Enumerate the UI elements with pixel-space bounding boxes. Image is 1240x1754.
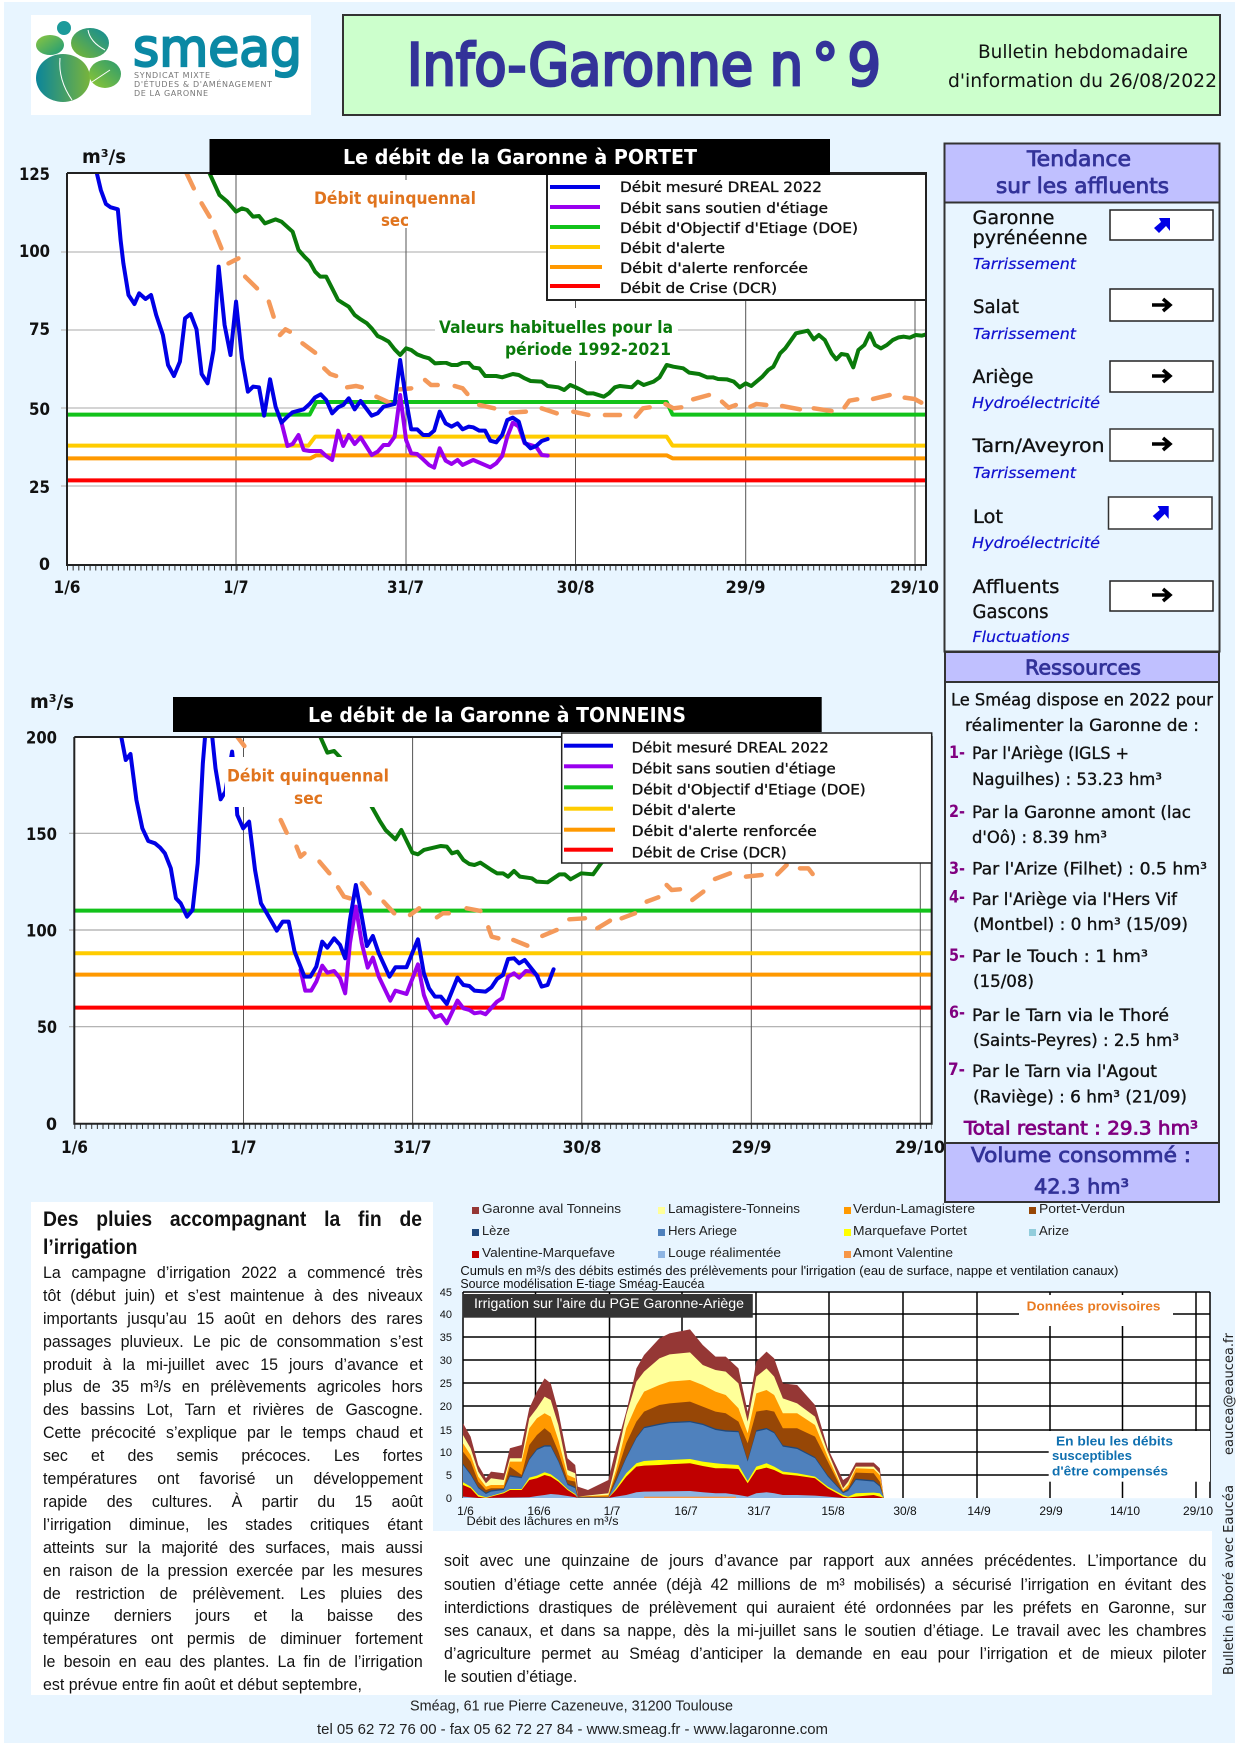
row: Lot — [972, 497, 1212, 552]
items list: Naguilhes) : 53.23 hm³ — [972, 770, 1162, 790]
row: Affluents Gascons: Gascons — [972, 601, 1048, 623]
article heading — [43, 1208, 422, 1259]
x axis labels: 15/8 — [821, 1504, 845, 1518]
article text: left column: de restriction de prélèvement. Les pluies des — [43, 1584, 423, 1603]
x axis labels: 29/10 — [890, 578, 939, 598]
logo wordmark: smeag — [133, 19, 302, 79]
x axis labels: 31/7 — [747, 1504, 771, 1518]
y axis labels: 25 — [440, 1378, 452, 1390]
item numbers: 6- — [949, 1003, 965, 1023]
intro text: Le Sméag dispose en 2022 pour — [951, 690, 1213, 710]
y axis labels: 25 — [29, 478, 50, 498]
y axis labels: 35 — [440, 1332, 452, 1344]
icon: arrow right — [1152, 589, 1170, 601]
x axis labels: 29/9 — [732, 1138, 772, 1158]
panel: ressources — [945, 652, 1219, 1143]
y axis labels: 50 — [29, 400, 50, 420]
chart legend: Amont Valentine — [853, 1245, 953, 1260]
article text: left column: températures ont favorisé un développement — [43, 1469, 423, 1488]
x axis labels: 1/7 — [604, 1504, 621, 1518]
article text: left column: La campagne d’irrigation 2022 a commencé très — [43, 1263, 423, 1282]
x axis labels: 14/10 — [1110, 1504, 1140, 1518]
y axis labels: 15 — [440, 1425, 452, 1437]
panel: volume consommé: Volume consommé : — [971, 1143, 1191, 1167]
y axis labels: 5 — [446, 1470, 452, 1482]
legend: Débit d'alerte renforcée — [632, 824, 817, 840]
article text: left column: plus de 35 m³/s en prélèvements agricoles hors — [43, 1377, 423, 1396]
x axis labels: 1/7 — [224, 578, 248, 598]
article text: continuation: soit avec une quinzaine de jours d’avance par rapport aux années précédentes. L’importance du — [444, 1551, 1206, 1570]
article white background — [31, 1202, 1212, 1695]
legend: Débit d'alerte — [632, 803, 736, 819]
legend: Débit sans soutien d'étiage — [632, 761, 836, 777]
chart subtitle: Cumuls en m³/s des débits estimés des prélèvements pour l'irrigation (eau de surface, nappe et ventilation canaux) — [460, 1264, 1118, 1278]
intro text: réalimenter la Garonne de : — [965, 716, 1199, 736]
title: Info-Garonne n°9 — [407, 31, 881, 99]
x axis labels: 16/7 — [674, 1504, 698, 1518]
item numbers: 4- — [949, 888, 965, 908]
items list: Par le Tarn via le Thoré — [972, 1006, 1169, 1026]
icon: arrow right — [1152, 299, 1170, 311]
axes frame — [74, 737, 932, 1124]
note: en bleu les débits: En bleu les débits — [1056, 1434, 1173, 1449]
vertical credit: email: eaucea@eaucea.fr — [1222, 1332, 1237, 1455]
row: Salat — [973, 289, 1213, 343]
items list: d'Oô) : 8.39 hm³ — [972, 828, 1107, 848]
icon: arrow up-right — [1154, 218, 1170, 233]
row: Affluents Gascons — [972, 576, 1213, 646]
y axis labels: 50 — [37, 1018, 57, 1038]
legend — [562, 733, 932, 863]
panel heading: Ressources — [1025, 656, 1141, 680]
icon: pebbles — [36, 21, 121, 102]
chart legend: Lèze — [482, 1223, 510, 1238]
x axis labels: 30/8 — [562, 1138, 602, 1158]
row: Salat: Salat — [973, 296, 1019, 318]
article text: left column: importants jusqu’au 15 août en dehors des rares — [43, 1309, 423, 1328]
legend: Débit de Crise (DCR) — [620, 281, 777, 297]
chart legend: Hers Ariege — [668, 1223, 737, 1238]
annotation: débit quinquennal sec: Débit quinquennal — [227, 767, 389, 787]
plot area — [463, 1292, 1210, 1498]
article text: left column: quinze derniers jours et la baisse des — [43, 1606, 423, 1625]
x axis labels: 1/6 — [54, 578, 80, 598]
annotation: valeurs habituelles — [435, 308, 678, 361]
y axis labels: 100 — [26, 922, 57, 942]
chart title bar: Le débit de la Garonne à PORTET — [343, 145, 697, 169]
x axis labels: 1/6 — [457, 1504, 474, 1518]
article text: continuation: ses canaux, et dans sa nappe, dès la mi-juillet sans le soutien d’étiage. Le travail avec les chambres — [444, 1621, 1206, 1640]
y axis labels — [440, 1287, 452, 1505]
chart legend: Garonne aval Tonneins — [482, 1201, 622, 1216]
panel heading: Tendance — [1026, 147, 1131, 171]
article text: continuation: soutien d’étiage cette année (déjà 42 millions de m³ mobilisés) a sécurisé l’irrigation en évitant des — [444, 1575, 1206, 1594]
x axis labels: 29/10 — [1183, 1504, 1213, 1518]
chart title box — [462, 1294, 753, 1318]
row: Lot: Hydroélectricité — [972, 534, 1100, 552]
article text: left column: sec et des semis précoces. Les fortes — [43, 1446, 423, 1465]
total restant: Total restant : 29.3 hm³ — [963, 1118, 1198, 1140]
article text: left column: températures ont permis de diminuer fortement — [43, 1629, 423, 1648]
plot area — [74, 737, 932, 1124]
article text: left column: en raison de la pression exercée par les mesures — [43, 1561, 423, 1580]
annotation: débit quinquennal sec: sec — [381, 211, 409, 231]
y axis labels: 0 — [446, 1493, 452, 1505]
row: Garonne pyrénéenne: Garonne — [972, 207, 1054, 229]
axis caption: Débit des lâchures en m³/s — [466, 1514, 618, 1528]
item numbers: 7- — [948, 1060, 965, 1080]
items list: (15/08) — [973, 972, 1034, 992]
logo: smeag — [31, 15, 311, 115]
legend: Débit sans soutien d'étiage — [620, 201, 828, 217]
y axis labels: 100 — [19, 242, 50, 262]
legend: Débit d'Objectif d'Etiage (DOE) — [632, 782, 866, 798]
row: Garonne pyrénéenne: Tarrissement — [973, 255, 1077, 273]
chart: irrigation stacked areas — [440, 1201, 1213, 1528]
chart: débit Garonne à Portet — [19, 139, 939, 598]
chart title box: Irrigation sur l'aire du PGE Garonne-Ariège — [474, 1296, 744, 1311]
icon: arrow right — [1152, 370, 1170, 382]
annotation: valeurs habituelles: période 1992-2021 — [505, 340, 671, 360]
item numbers: 5- — [949, 946, 965, 966]
bulletin date — [948, 41, 1217, 92]
x axis labels: 29/10 — [895, 1138, 945, 1158]
title banner — [343, 15, 1220, 115]
items list — [972, 744, 1207, 1108]
footer: Sméag, 61 rue Pierre Cazeneuve, 31200 Toulouse — [410, 1698, 733, 1715]
items list: Par le Touch : 1 hm³ — [972, 947, 1148, 967]
items list: Par la Garonne amont (lac — [972, 803, 1191, 823]
article text: left column: est prévue entre fin août et début septembre, — [43, 1675, 362, 1694]
legend: Débit mesuré DREAL 2022 — [632, 740, 829, 756]
bulletin date: Bulletin hebdomadaire — [978, 41, 1188, 63]
threshold and flow curves — [74, 730, 933, 1023]
legend: Débit d'Objectif d'Etiage (DOE) — [620, 221, 858, 237]
row: Salat: Tarrissement — [973, 325, 1077, 343]
row: Lot: Lot — [973, 506, 1003, 528]
annotation: débit quinquennal sec — [225, 757, 411, 809]
y axis labels: 75 — [29, 320, 50, 340]
row: Garonne pyrénéenne: pyrénéenne — [972, 227, 1088, 249]
panel: volume consommé: 42.3 hm³ — [1034, 1174, 1129, 1198]
plot area — [67, 173, 926, 565]
chart legend: Arize — [1039, 1223, 1069, 1238]
row: Tarn/Aveyron — [971, 429, 1213, 482]
note: en bleu les débits: d'être compensés — [1052, 1464, 1168, 1479]
annotation: débit quinquennal sec — [312, 180, 478, 231]
chart: débit Garonne à Tonneins — [26, 691, 945, 1158]
x axis labels: 29/9 — [726, 578, 766, 598]
panel: tendance sur les affluents — [944, 144, 1220, 652]
chart title bar: Le débit de la Garonne à TONNEINS — [308, 703, 686, 727]
article text: continuation: le soutien d’étiage. — [444, 1667, 577, 1686]
y axis labels: 150 — [26, 825, 57, 845]
chart legend: Portet-Verdun — [1039, 1201, 1125, 1216]
y axis labels: 125 — [19, 165, 50, 185]
legend: Débit mesuré DREAL 2022 — [620, 180, 822, 196]
article text: left column: produit à la mi-juillet avec 15 jours d’avance et — [43, 1355, 423, 1374]
chart subtitle — [460, 1264, 1118, 1291]
annotation: débit quinquennal sec: Débit quinquennal — [314, 189, 476, 209]
y axis labels: 45 — [440, 1287, 452, 1299]
note: en bleu les débits: susceptibles — [1052, 1448, 1132, 1463]
row: Ariège: Ariège — [972, 366, 1034, 388]
chart legend: Valentine-Marquefave — [482, 1245, 615, 1260]
chart legend: Marquefave Portet — [853, 1223, 967, 1238]
x axis labels: 30/8 — [556, 578, 594, 598]
annotation: débit quinquennal sec: sec — [294, 789, 323, 809]
logo tagline: SYNDICAT MIXTE — [134, 71, 210, 80]
threshold and flow curves — [67, 173, 928, 480]
article heading: l’irrigation — [43, 1236, 137, 1259]
article text: continuation — [444, 1551, 1206, 1686]
article text: left column: atteints sur la majorité des surfaces, mais aussi — [43, 1538, 423, 1557]
footer — [317, 1698, 828, 1738]
row: Tarn/Aveyron: Tarrissement — [973, 464, 1077, 482]
x axis labels — [54, 578, 939, 598]
logo tagline: D'ÉTUDES & D'AMÉNAGEMENT — [134, 78, 272, 89]
bulletin date: d'information du 26/08/2022 — [948, 70, 1217, 92]
article text: left column: des bassins Lot, Tarn et rivières de Gascogne. — [43, 1400, 423, 1419]
x axis labels: 31/7 — [394, 1138, 432, 1158]
x axis labels: 14/9 — [967, 1504, 991, 1518]
row: Affluents Gascons: Fluctuations — [972, 628, 1070, 646]
article text: continuation: interdictions drastiques de prélèvement qui auraient été ordonnées par les préfets en Garonne, sur — [444, 1598, 1206, 1617]
y axis labels — [26, 728, 57, 1135]
article text: left column: rapide des cultures. À partir du 15 août — [43, 1492, 423, 1511]
article text: left column: tôt (début juin) et s’est maintenue à des niveaux — [43, 1286, 423, 1305]
items list: Par l'Arize (Filhet) : 0.5 hm³ — [972, 860, 1207, 880]
y axis labels: 40 — [440, 1309, 452, 1321]
note: données provisoires: Données provisoires — [1027, 1299, 1160, 1314]
item numbers: 2- — [949, 802, 965, 822]
x axis labels — [61, 1138, 945, 1158]
icon: arrow right — [1152, 438, 1170, 450]
article text: continuation: d’agriculture permet au Sméag d’anticiper la demande en eau pour l’irrigation et de mieux piloter — [444, 1644, 1206, 1663]
icon: arrow up-right — [1153, 506, 1169, 521]
note: en bleu les débits — [1049, 1431, 1210, 1482]
x axis labels — [457, 1504, 1213, 1518]
row: Affluents Gascons: Affluents — [972, 576, 1060, 598]
y axis labels: 20 — [440, 1401, 452, 1413]
legend: Débit d'alerte renforcée — [620, 261, 808, 277]
x axis labels: 29/9 — [1039, 1504, 1063, 1518]
stacked areas — [463, 1329, 884, 1498]
items list: Par l'Ariège (IGLS + — [972, 744, 1129, 764]
chart title bar — [173, 697, 822, 732]
row: Ariège — [972, 361, 1213, 412]
note: données provisoires — [1019, 1295, 1173, 1326]
vertical credit: bulletin: Bulletin élaboré avec Eaucéa — [1222, 1485, 1237, 1675]
x axis labels: 31/7 — [387, 578, 424, 598]
items list: Par le Tarn via l'Agout — [972, 1062, 1157, 1082]
x axis labels: 16/6 — [527, 1504, 551, 1518]
article text: left column: l’irrigation diminue, les stades critiques étant — [43, 1515, 423, 1534]
axes frame — [67, 173, 926, 565]
y axis labels: 10 — [440, 1447, 452, 1459]
annotation: valeurs habituelles: Valeurs habituelles pour la — [439, 318, 673, 338]
panel heading — [945, 652, 1219, 682]
y axis unit: m³/s — [82, 146, 126, 168]
y axis labels: 200 — [26, 728, 57, 748]
chart subtitle: Source modélisation E-tiage Sméag-Eaucéa — [460, 1277, 704, 1291]
x axis labels: 30/8 — [893, 1504, 917, 1518]
chart title bar — [210, 139, 830, 175]
legend — [547, 174, 926, 300]
logo tagline: DE LA GARONNE — [134, 89, 208, 98]
row: Garonne pyrénéenne — [972, 207, 1213, 273]
items list: Par l'Ariège via l'Hers Vif — [972, 890, 1178, 910]
article text: left column: le besoin en eau des plantes. La fin de l’irrigation — [43, 1652, 423, 1671]
footer: tel 05 62 72 76 00 - fax 05 62 72 27 84 - www.smeag.fr - www.lagaronne.com — [317, 1721, 828, 1738]
article heading: Des pluies accompagnant la fin de — [43, 1208, 422, 1231]
panel: volume consommé — [945, 1143, 1219, 1202]
article text: left column — [43, 1263, 423, 1694]
item numbers — [948, 743, 965, 1080]
items list: (Raviège) : 6 hm³ (21/09) — [973, 1088, 1187, 1108]
y axis labels — [19, 165, 50, 575]
item numbers: 3- — [949, 859, 965, 879]
items list: (Saints-Peyres) : 2.5 hm³ — [973, 1031, 1179, 1051]
panel heading: sur les affluents — [996, 174, 1169, 198]
items list: (Montbel) : 0 hm³ (15/09) — [973, 915, 1188, 935]
y axis labels: 0 — [46, 1115, 57, 1135]
chart legend: Lamagistere-Tonneins — [668, 1201, 801, 1216]
chart legend: Louge réalimentée — [668, 1245, 781, 1260]
chart legend — [472, 1201, 1125, 1260]
chart legend: Verdun-Lamagistere — [853, 1201, 975, 1216]
y axis unit: m³/s — [30, 691, 74, 713]
logo tagline — [134, 71, 272, 98]
x axis labels: 1/7 — [230, 1138, 256, 1158]
intro text — [951, 690, 1213, 736]
item numbers: 1- — [949, 743, 965, 763]
article text: left column: Cette précocité s’explique par le temps chaud et — [43, 1423, 423, 1442]
y axis labels: 0 — [39, 555, 50, 575]
row: Ariège: Hydroélectricité — [972, 394, 1100, 412]
x axis labels: 1/6 — [61, 1138, 88, 1158]
row: Tarn/Aveyron: Tarn/Aveyron — [971, 435, 1104, 457]
y axis labels: 30 — [440, 1355, 452, 1367]
panel heading — [944, 144, 1220, 202]
legend: Débit de Crise (DCR) — [632, 845, 787, 861]
legend: Débit d'alerte — [620, 241, 725, 257]
article text: left column: passages pluvieux. Le pic de consommation s’est — [43, 1332, 423, 1351]
